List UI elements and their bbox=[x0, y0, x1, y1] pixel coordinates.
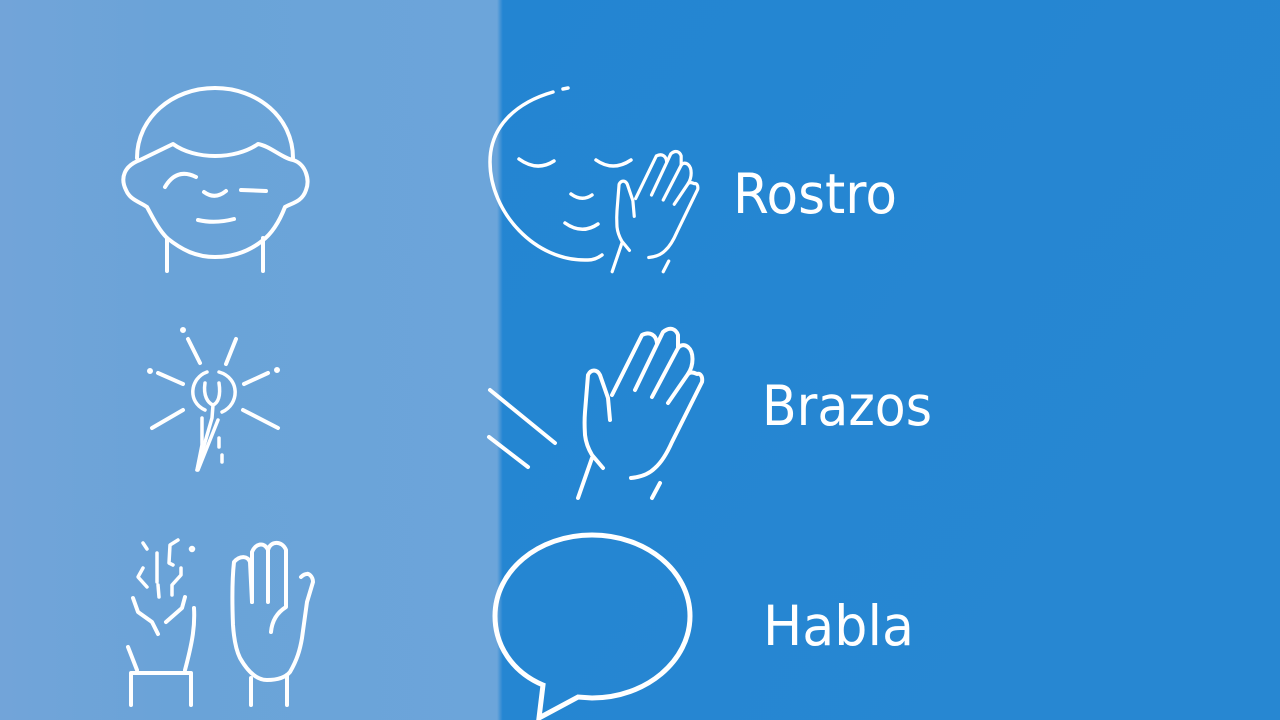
icon: speech bubble bbox=[495, 535, 690, 718]
icon: smiling face with hand touching cheek bbox=[490, 88, 698, 272]
text: Habla: Habla bbox=[763, 594, 914, 658]
icon: numb disintegrating hand and raised hand bbox=[128, 540, 313, 705]
icon: drooping face bbox=[123, 88, 307, 271]
icon: waving hand bbox=[489, 329, 702, 498]
text: Brazos: Brazos bbox=[762, 374, 932, 438]
text: Rostro: Rostro bbox=[733, 162, 897, 226]
panel: left light blue overlay bbox=[0, 0, 503, 720]
icon: arm numbness nerve burst bbox=[148, 328, 279, 470]
